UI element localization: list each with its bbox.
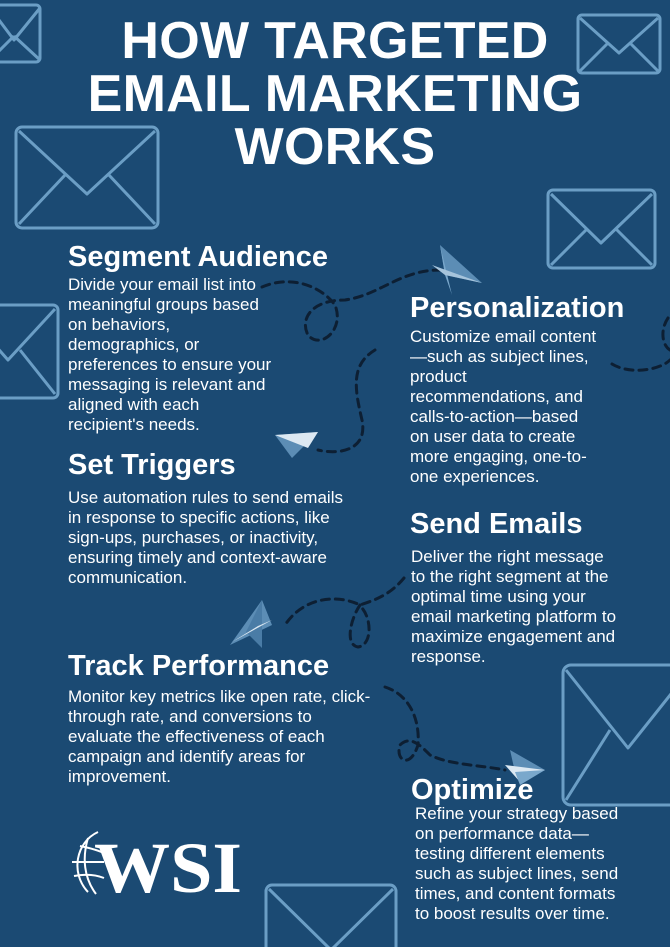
title: [88, 12, 582, 176]
text block: Refine your strategy based: [415, 804, 618, 823]
text block: [411, 547, 616, 666]
text block: messaging is relevant and: [68, 375, 266, 394]
text block: ensuring timely and context-aware: [68, 548, 327, 567]
text block: email marketing platform to: [411, 607, 616, 626]
icon: envelope left middle: [0, 305, 58, 398]
heading: Segment Audience: [68, 241, 328, 273]
text block: Divide your email list into: [68, 275, 256, 294]
title: EMAIL MARKETING: [88, 65, 582, 123]
title: HOW TARGETED: [121, 12, 549, 70]
text block: testing different elements: [415, 844, 605, 863]
text block: optimal time using your: [411, 587, 586, 606]
arrow: segment to personalization: [262, 270, 440, 340]
text block: one experiences.: [410, 467, 539, 486]
icon: envelope top-left: [0, 5, 40, 62]
icon: envelope top-right: [578, 15, 660, 73]
arrow: send to track: [285, 578, 404, 647]
arrow: track to optimize: [385, 687, 505, 770]
text block: recipient's needs.: [68, 415, 200, 434]
text block: sign-ups, purchases, or inactivity,: [68, 528, 318, 547]
text block: communication.: [68, 568, 187, 587]
panel: send emails: [410, 508, 616, 666]
panel: optimize: [411, 774, 618, 923]
text block: on user data to create: [410, 427, 575, 446]
heading: Set Triggers: [68, 449, 236, 481]
text block: on behaviors,: [68, 315, 170, 334]
text block: Monitor key metrics like open rate, click-: [68, 687, 370, 706]
arrow: personalization to triggers: [318, 350, 375, 452]
text block: [68, 488, 343, 587]
icon: envelope large left: [16, 127, 158, 228]
text block: campaign and identify areas for: [68, 747, 305, 766]
text block: meaningful groups based: [68, 295, 259, 314]
icon: paper plane 3: [230, 600, 272, 648]
text block: recommendations, and: [410, 387, 583, 406]
text block: product: [410, 367, 467, 386]
text block: such as subject lines, send: [415, 864, 618, 883]
heading: Track Performance: [68, 650, 329, 682]
text block: more engaging, one-to-: [410, 447, 587, 466]
text block: aligned with each: [68, 395, 199, 414]
panel: set triggers: [68, 449, 343, 587]
text block: preferences to ensure your: [68, 355, 271, 374]
text block: improvement.: [68, 767, 171, 786]
icon: envelope right: [548, 190, 655, 268]
panel: track performance: [68, 650, 370, 786]
text block: maximize engagement and: [411, 627, 615, 646]
icon: paper plane 2: [275, 432, 318, 458]
text block: times, and content formats: [415, 884, 615, 903]
text block: [410, 327, 596, 486]
text block: on performance data—: [415, 824, 589, 843]
heading: Optimize: [411, 774, 533, 806]
text block: to the right segment at the: [411, 567, 609, 586]
text block: —such as subject lines,: [410, 347, 589, 366]
text block: to boost results over time.: [415, 904, 610, 923]
heading: Send Emails: [410, 508, 582, 540]
panel: segment audience: [68, 241, 328, 434]
text block: response.: [411, 647, 486, 666]
icon: envelope bottom right: [563, 665, 670, 805]
text block: Use automation rules to send emails: [68, 488, 343, 507]
text block: Deliver the right message: [411, 547, 604, 566]
arrow: right edge: [612, 318, 670, 370]
title: WORKS: [235, 118, 435, 176]
panel: personalization: [410, 292, 624, 486]
text block: in response to specific actions, like: [68, 508, 330, 527]
text block: [415, 804, 618, 923]
icon: envelope bottom: [266, 885, 396, 947]
text block: evaluate the effectiveness of each: [68, 727, 325, 746]
icon: paper plane 1: [432, 245, 482, 295]
text block: [68, 687, 370, 786]
text block: calls-to-action—based: [410, 407, 578, 426]
icon: paper plane 4: [505, 750, 545, 785]
heading: Personalization: [410, 292, 624, 324]
text block: Customize email content: [410, 327, 596, 346]
text block: through rate, and conversions to: [68, 707, 312, 726]
text block: [68, 275, 271, 434]
text block: demographics, or: [68, 335, 199, 354]
